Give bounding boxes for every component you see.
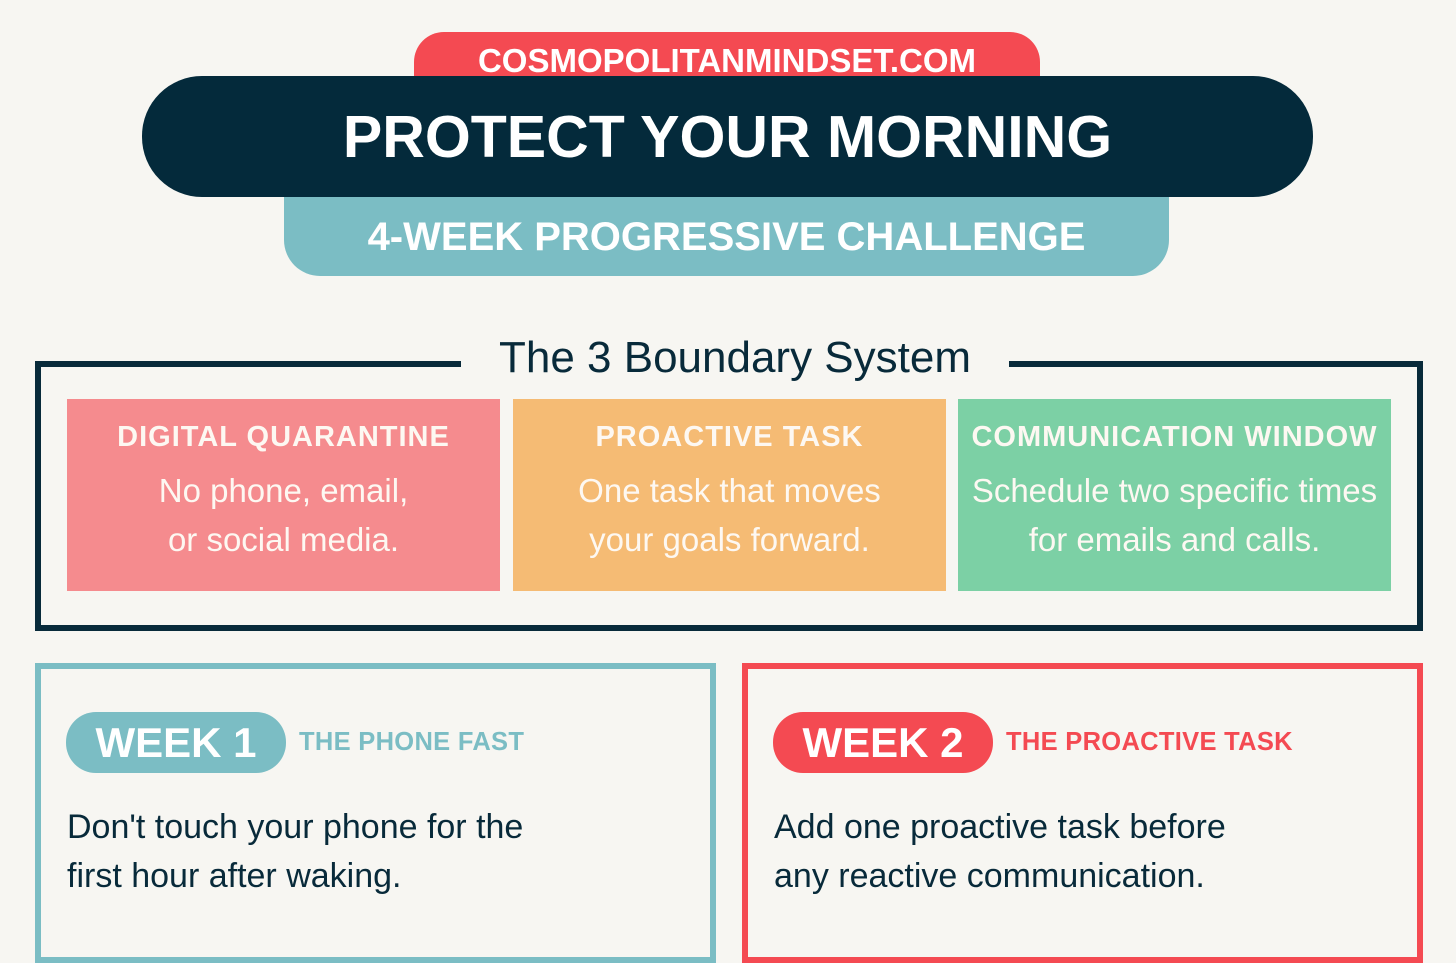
card: proactive task: PROACTIVE TASK xyxy=(595,421,864,453)
card: proactive task: your goals forward. xyxy=(589,521,870,558)
week 1 badge xyxy=(66,712,286,773)
title: PROTECT YOUR MORNING xyxy=(343,104,1112,170)
card: proactive task xyxy=(513,399,946,591)
panel: week 1 xyxy=(35,663,716,963)
week 2 label: THE PROACTIVE TASK xyxy=(1006,728,1293,756)
title xyxy=(142,76,1313,197)
card: communication window: COMMUNICATION WINDOW xyxy=(971,421,1378,453)
card: digital quarantine: DIGITAL QUARANTINE xyxy=(117,421,450,453)
card: communication window: for emails and calls. xyxy=(1029,521,1320,558)
week 2 badge: WEEK 2 xyxy=(802,718,964,766)
card: digital quarantine: or social media. xyxy=(168,521,399,558)
week 1 text: Don't touch your phone for the xyxy=(67,808,523,846)
card: digital quarantine xyxy=(67,399,500,591)
heading: boundary system: The 3 Boundary System xyxy=(499,333,971,382)
subtitle banner: 4-WEEK PROGRESSIVE CHALLENGE xyxy=(368,214,1085,258)
subtitle banner xyxy=(284,180,1169,276)
website banner: COSMOPOLITANMINDSET.COM xyxy=(478,42,976,79)
week 2 text xyxy=(774,808,1226,895)
week 2 badge xyxy=(773,712,993,773)
panel: week 2 xyxy=(742,663,1423,963)
panel: boundary system xyxy=(35,361,1423,631)
card: communication window: Schedule two specific times xyxy=(972,472,1377,509)
week 2 text: Add one proactive task before xyxy=(774,808,1226,846)
card: digital quarantine: No phone, email, xyxy=(159,472,408,509)
week 1 text: first hour after waking. xyxy=(67,857,401,895)
card: communication window xyxy=(958,399,1391,591)
week 1 badge: WEEK 1 xyxy=(95,718,257,766)
week 2 text: any reactive communication. xyxy=(774,857,1205,895)
week 1 label: THE PHONE FAST xyxy=(299,728,524,756)
card: proactive task: One task that moves xyxy=(578,472,881,509)
week 1 text xyxy=(67,808,523,895)
website banner xyxy=(414,32,1040,92)
